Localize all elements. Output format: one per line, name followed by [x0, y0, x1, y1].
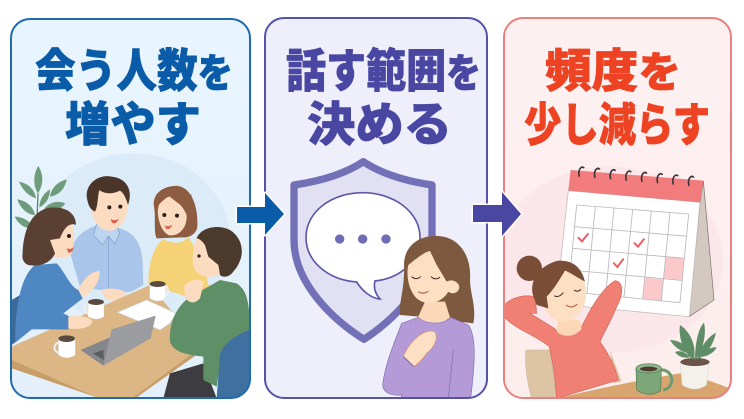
- icon: plant: [15, 166, 67, 230]
- arrow: purple: [473, 192, 521, 236]
- heading: increase people: 会う人数を: [35, 45, 233, 97]
- icon: green mug: [636, 364, 672, 394]
- figure: woman in blue sweater: [12, 207, 100, 345]
- heading: increase people: [35, 45, 233, 151]
- panel: reduce frequency: [497, 18, 731, 398]
- heading: decide topic scope: 決める: [307, 98, 452, 151]
- figure: woman with hand on chest: [383, 236, 474, 398]
- desk: [557, 373, 730, 398]
- heading: reduce frequency: 頻度を: [545, 45, 681, 97]
- figure: man in blue shirt: [71, 176, 143, 301]
- icon: laptop: [81, 316, 156, 366]
- panel: increase people: [11, 19, 250, 398]
- heading: reduce frequency: [524, 45, 710, 151]
- panel: decide topic scope: [265, 18, 487, 398]
- illustration: four people meeting at a table: [12, 153, 250, 398]
- icon: coffee mug: [84, 299, 104, 319]
- heading: increase people: 増やす: [65, 98, 201, 151]
- icon: speech bubble: [306, 193, 420, 299]
- arrow: blue: [237, 193, 284, 235]
- figure: woman in yellow sweater: [148, 186, 210, 297]
- heading: decide topic scope: [286, 45, 481, 151]
- icon: shield: [294, 162, 432, 339]
- figure: man in green sweater: [163, 227, 250, 398]
- table: [12, 285, 203, 397]
- icon: potted plant: [670, 323, 717, 389]
- icon: coffee mug: [150, 281, 168, 301]
- figure: relaxing woman: [500, 256, 622, 398]
- heading: decide topic scope: 話す範囲を: [286, 45, 481, 97]
- icon: coffee mug: [54, 335, 75, 358]
- icon: desk calendar: [556, 167, 714, 317]
- icon: papers: [117, 300, 176, 330]
